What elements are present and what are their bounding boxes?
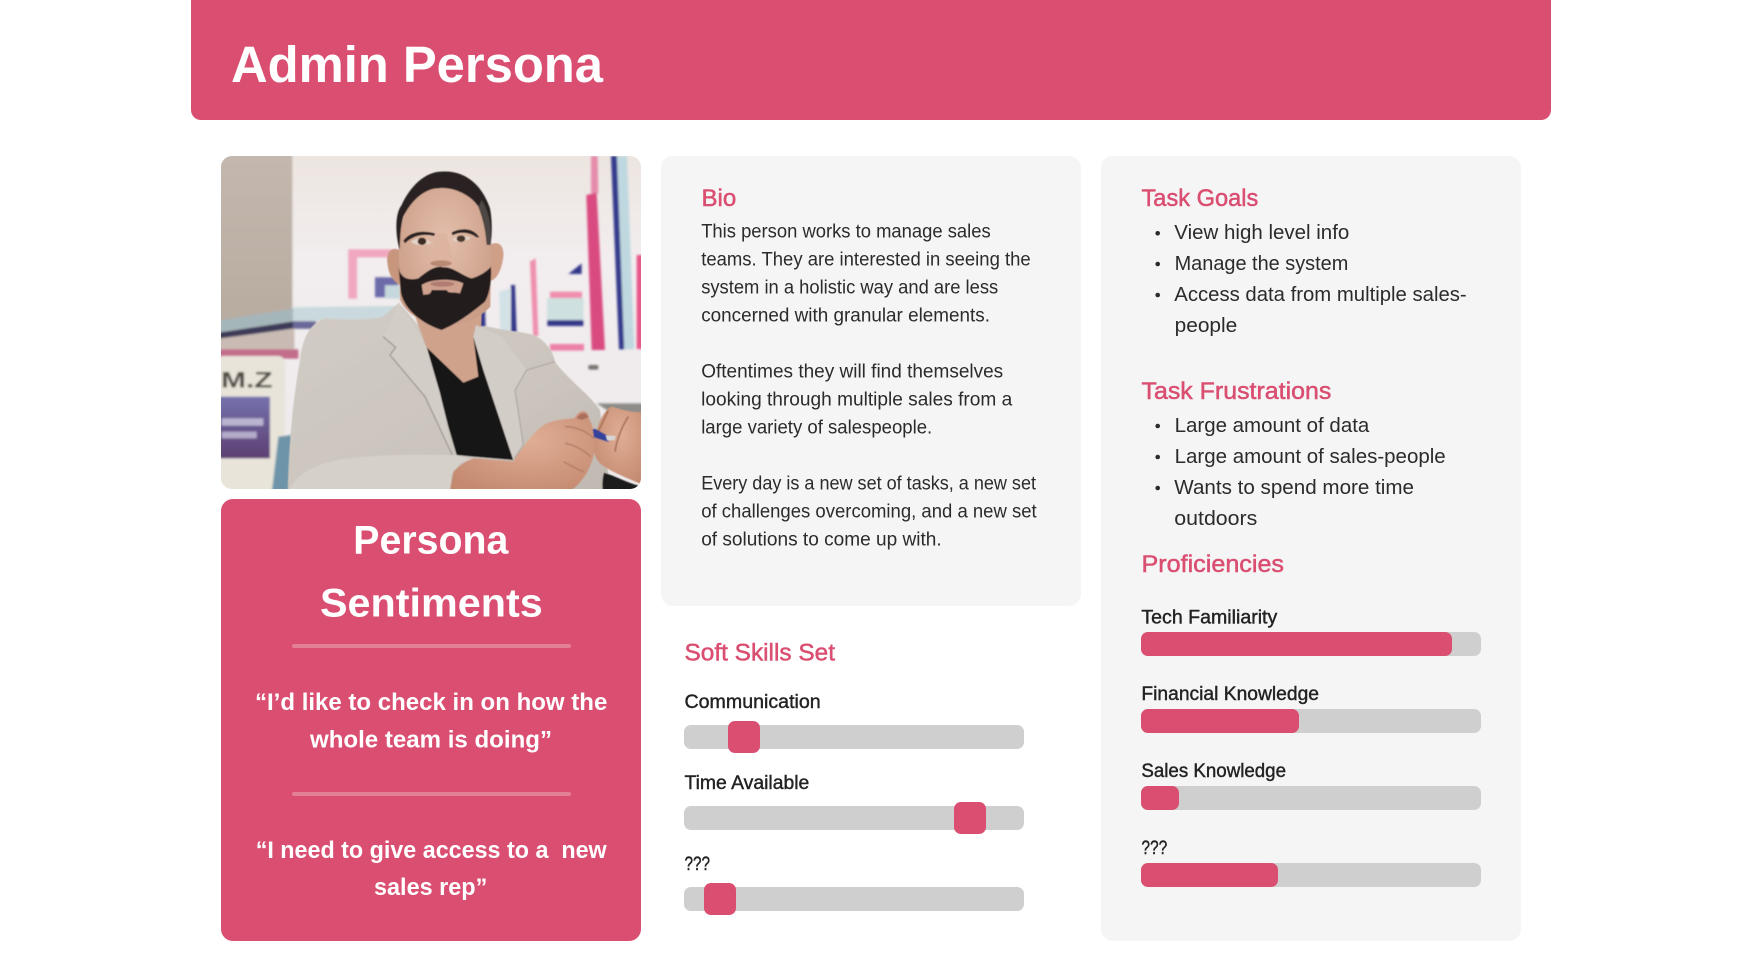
bar: sales knowledge bbox=[1141, 761, 1481, 810]
heading: bio: Bio bbox=[702, 185, 736, 212]
heading: soft skills: Soft Skills Set bbox=[684, 640, 835, 667]
quote: check in on the team bbox=[255, 689, 607, 753]
bar: financial knowledge bbox=[1141, 684, 1481, 733]
slider: time available: Time Available bbox=[684, 773, 809, 794]
brows bbox=[403, 232, 435, 243]
bio paragraph 2: large variety of salespeople. bbox=[701, 417, 932, 438]
ears bbox=[387, 249, 400, 285]
bio paragraph 1: concerned with granular elements. bbox=[701, 305, 990, 326]
list: task frustrations bbox=[1155, 415, 1446, 530]
bio paragraph 3: Every day is a new set of tasks, a new set bbox=[701, 473, 1037, 494]
bio paragraph 3: of challenges overcoming, and a new set bbox=[701, 501, 1037, 522]
jacket bbox=[288, 303, 617, 493]
bar: tech familiarity bbox=[1141, 607, 1481, 656]
panel: goals, frustrations and proficiencies bbox=[1101, 156, 1521, 941]
bio paragraph 1 bbox=[701, 221, 1031, 326]
list: task goals: people bbox=[1175, 315, 1237, 337]
bar: unknown proficiency bbox=[1141, 838, 1481, 887]
quote: give access to a new rep: “I need to give access to a new bbox=[256, 837, 607, 864]
nose bbox=[440, 234, 449, 248]
heading: persona sentiments: Persona bbox=[353, 518, 509, 562]
heading: task goals: Task Goals bbox=[1142, 185, 1258, 212]
neck bbox=[415, 314, 482, 384]
bio paragraph 1: system in a holistic way and are less bbox=[701, 277, 998, 298]
slider: unknown skill: ??? bbox=[684, 854, 710, 875]
bar: unknown proficiency: ??? bbox=[1141, 838, 1167, 859]
list: task frustrations: Large amount of data bbox=[1175, 415, 1370, 437]
list: task goals: View high level info bbox=[1174, 222, 1349, 244]
panel: soft skills set bbox=[684, 640, 1024, 915]
list: task goals bbox=[1155, 222, 1467, 337]
panel: bio bbox=[661, 156, 1081, 606]
hair bbox=[396, 172, 492, 250]
bar: sales knowledge: Sales Knowledge bbox=[1141, 761, 1286, 782]
slider: time available bbox=[684, 773, 1024, 834]
bio paragraph 1: This person works to manage sales bbox=[701, 221, 991, 242]
face bbox=[399, 183, 491, 325]
bio paragraph 1: teams. They are interested in seeing the bbox=[701, 249, 1031, 270]
bar: tech familiarity: Tech Familiarity bbox=[1141, 607, 1278, 628]
beard bbox=[398, 265, 491, 330]
list: task goals: Access data from multiple sales- bbox=[1174, 284, 1467, 306]
portrait photo: M.Z bbox=[221, 367, 273, 392]
heading: persona sentiments bbox=[320, 518, 543, 626]
bio paragraph 2: Oftentimes they will find themselves bbox=[701, 361, 1003, 382]
left sleeve bbox=[288, 455, 474, 493]
heading: task frustrations: Task Frustrations bbox=[1142, 378, 1331, 405]
quote: give access to a new rep bbox=[256, 837, 607, 901]
bio paragraph 2: looking through multiple sales from a bbox=[701, 389, 1013, 410]
slider: communication: Communication bbox=[684, 692, 821, 713]
title: Admin Persona bbox=[231, 36, 604, 93]
bio paragraph 3: of solutions to come up with. bbox=[701, 529, 942, 550]
slider: unknown skill bbox=[684, 854, 1024, 915]
bar: financial knowledge: Financial Knowledge bbox=[1141, 684, 1319, 705]
hands bbox=[449, 407, 643, 493]
shirt bbox=[427, 337, 513, 460]
lapels bbox=[288, 303, 555, 493]
slider: communication bbox=[684, 692, 1024, 753]
bio paragraph 2 bbox=[701, 361, 1013, 438]
panel: persona sentiments bbox=[221, 499, 641, 941]
portrait photo bbox=[217, 153, 645, 493]
eyes bbox=[411, 239, 432, 245]
mouth and chin bbox=[422, 280, 463, 295]
heading: proficiencies: Proficiencies bbox=[1142, 551, 1284, 578]
quote: give access to a new rep: sales rep” bbox=[374, 874, 487, 901]
header banner bbox=[191, 0, 1551, 120]
quote: check in on the team: “I’d like to check in on how the bbox=[255, 689, 607, 716]
bio paragraph 3 bbox=[701, 473, 1037, 550]
quote: check in on the team: whole team is doing” bbox=[309, 726, 552, 753]
heading: persona sentiments: Sentiments bbox=[320, 582, 543, 626]
list: task frustrations: Wants to spend more time bbox=[1174, 477, 1414, 499]
list: task frustrations: Large amount of sales-people bbox=[1175, 446, 1446, 468]
list: task goals: Manage the system bbox=[1175, 253, 1348, 275]
list: task frustrations: outdoors bbox=[1174, 508, 1257, 530]
